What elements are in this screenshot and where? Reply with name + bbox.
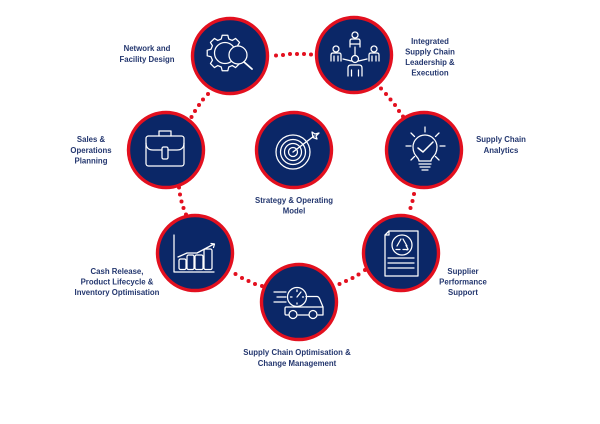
node: sales and operations planning: Planning bbox=[75, 156, 108, 166]
icon: gear with magnifier bbox=[207, 35, 252, 71]
label: Network and bbox=[124, 44, 171, 53]
label: Supplier bbox=[447, 267, 479, 276]
label: Supply Chain bbox=[476, 135, 526, 144]
node: supply chain optimisation and change management: Change Management bbox=[258, 359, 337, 368]
icon: light bulb with check bbox=[406, 127, 445, 170]
icon: connected people bbox=[331, 32, 379, 76]
node: integrated supply chain leadership and execution: Supply Chain bbox=[405, 48, 455, 56]
node: sales and operations planning: Operations bbox=[70, 146, 112, 155]
label: Integrated bbox=[411, 37, 449, 46]
node: supply chain analytics: Analytics bbox=[484, 146, 519, 155]
icon: document with recycle symbol bbox=[385, 231, 418, 276]
label: Supply Chain Optimisation & bbox=[243, 348, 351, 357]
icon: target with arrow bbox=[276, 132, 319, 169]
node: supplier performance support bbox=[364, 216, 487, 297]
node: network and facility design bbox=[119, 18, 268, 94]
node: supply chain optimisation and change management bbox=[243, 264, 351, 368]
node: integrated supply chain leadership and execution bbox=[316, 18, 455, 92]
node: strategy and operating model bbox=[255, 112, 333, 216]
node: cash release: Inventory Optimisation bbox=[75, 288, 160, 297]
node: strategy and operating model: Model bbox=[283, 206, 305, 216]
node: cash release bbox=[75, 216, 232, 297]
node: integrated supply chain leadership and execution: Leadership & bbox=[405, 58, 455, 67]
node: supplier performance support: Support bbox=[448, 288, 478, 297]
label: Cash Release, bbox=[91, 267, 143, 276]
node: integrated supply chain leadership and execution: Execution bbox=[411, 68, 449, 78]
node: cash release: Product Lifecycle & bbox=[81, 278, 154, 286]
node: sales and operations planning bbox=[70, 112, 204, 188]
icon: growth chart bbox=[174, 235, 214, 272]
label: Strategy & Operating bbox=[255, 196, 333, 205]
icon: briefcase bbox=[146, 131, 184, 166]
node: network and facility design: Facility Design bbox=[119, 55, 175, 64]
node: supplier performance support: Performance bbox=[439, 278, 487, 286]
node: supply chain analytics bbox=[386, 112, 526, 188]
dotted connectors bbox=[177, 52, 416, 288]
icon: truck with clock bbox=[274, 288, 323, 318]
label: Sales & bbox=[77, 135, 105, 144]
